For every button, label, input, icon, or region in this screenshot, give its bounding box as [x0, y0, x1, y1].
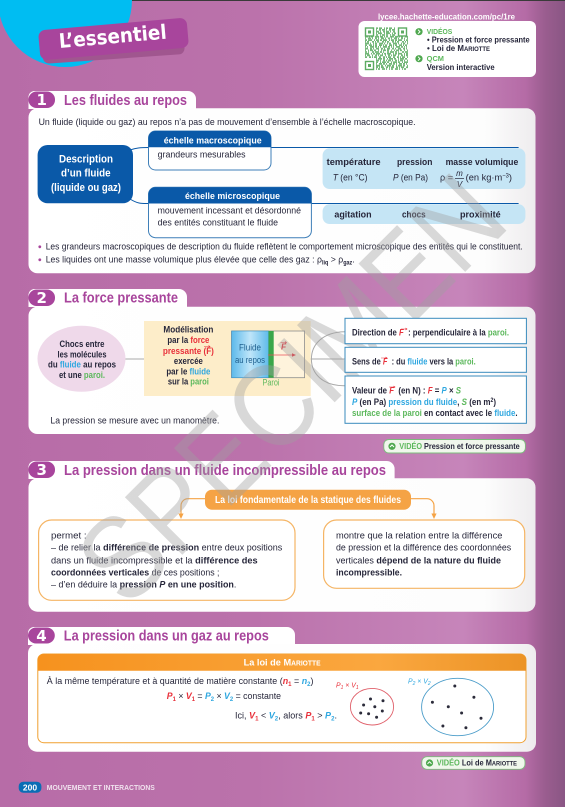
bullet list: gaz: [343, 261, 352, 267]
box: loi de Mariotte: P: [205, 691, 211, 702]
box: permet: coordonnées verticales de ces positions ;: [51, 568, 220, 579]
box: loi de Mariotte: 2: [331, 716, 335, 723]
box: permet: permet :: [51, 531, 87, 542]
schema: fluide au repos, paroi, force: au repos: [235, 355, 265, 366]
box: loi de Mariotte: 1: [192, 696, 195, 703]
diagram: gas at P2 V2: P: [408, 678, 413, 685]
ellipse: chocs entre les molécules: du fluide au repos: [48, 360, 116, 371]
panel 4: La pression dans un gaz au repos: [28, 627, 536, 752]
diagram: gas at P2 V2: 2: [427, 681, 431, 687]
heading tab 3: La pression dans un fluide incompressible au repos: [64, 462, 386, 479]
box: grandeurs mesurables: P (en Pa): [393, 173, 428, 184]
box: loi de Mariotte: 1: [173, 696, 176, 703]
box: modélisation: exercée: [174, 356, 203, 367]
box: comportement microscopique: chocs: [402, 210, 426, 221]
box: échelle microscopique: échelle microscopique: [185, 191, 280, 202]
box: loi de Mariotte: 1: [255, 716, 259, 723]
diagram: gas at P1 V1: ×: [343, 683, 351, 690]
box: loi de Mariotte: ): [311, 676, 313, 687]
ellipse: chocs entre les molécules: Chocs entre: [60, 339, 104, 350]
panel 3: La pression dans un fluide incompressible au repos: [28, 461, 536, 612]
box: comportement microscopique: [323, 204, 525, 224]
box: loi de Mariotte: 2: [307, 681, 311, 688]
box: valeur: Valeur de F (en N) : F = P × S: [352, 386, 461, 397]
heading tab 3: 3: [36, 461, 47, 479]
box: loi de Mariotte: 1: [288, 681, 292, 688]
video chip: pression et force pressante: VIDÉO Pression et force pressante: [399, 442, 520, 451]
box: sens: [345, 347, 526, 372]
QCM heading: QCM: [427, 56, 444, 63]
bullet list: Les liquides ont une masse volumique plus élevée que celle des gaz : ρ: [46, 255, 350, 266]
heading tab 2: 2: [36, 289, 47, 307]
bullet list: liq: [322, 261, 329, 267]
box: loi de Mariotte: <: [258, 711, 269, 722]
panel 2: La force pressante: [28, 289, 536, 434]
box: loi de Mariotte: .: [334, 711, 337, 722]
bullet list: [38, 242, 523, 267]
box: échelle microscopique: des entités constituant le fluide: [158, 218, 278, 229]
panel 1: Les fluides au repos: [28, 91, 536, 273]
box: loi de Mariotte: P: [305, 711, 312, 722]
box: grandeurs mesurables: −3: [502, 174, 510, 180]
box: modélisation: par la force: [167, 335, 209, 346]
heading tab 1: [28, 91, 196, 109]
box: modélisation: [144, 321, 311, 396]
diagram: gas at P1 V1: [336, 683, 394, 725]
video chip: pression et force pressante: [384, 440, 525, 453]
heading tab 1: Les fluides au repos: [64, 92, 187, 109]
video chip: loi de Mariotte: [422, 757, 525, 769]
box: loi de Mariotte: P: [325, 711, 332, 722]
box: description d'un fluide: Description: [59, 154, 113, 166]
box: loi de Mariotte: La loi de MARIOTTE: [244, 658, 321, 669]
box: loi de Mariotte: ×: [214, 691, 224, 702]
box: grandeurs mesurables: m: [456, 169, 463, 178]
bullet list: > ρ: [328, 255, 344, 266]
heading tab 2: [28, 289, 187, 307]
box: montre: incompressible.: [336, 568, 402, 579]
box: permet: dans un fluide incompressible et la différence des: [51, 555, 258, 566]
box: grandeurs mesurables: masse volumique: [446, 157, 518, 168]
box: loi de Mariotte: 2: [230, 696, 234, 703]
diagram: gas at P2 V2: ×: [415, 678, 423, 685]
box: modélisation: Modélisation: [163, 325, 214, 336]
schema: fluide au repos, paroi, force: F: [281, 341, 287, 351]
box: échelle microscopique: mouvement incessant et désordonné: [158, 206, 301, 217]
box: loi de Mariotte: = constante: [233, 691, 281, 702]
connector: schema to details: [311, 332, 345, 386]
box: sens: Sens de F : du fluide vers la paroi.: [352, 357, 476, 368]
box: loi de Mariotte: V: [224, 691, 231, 702]
box: grandeurs mesurables: ρ =: [440, 173, 453, 184]
diagram: gas at P2 V2: V: [423, 678, 428, 685]
box: valeur: P (en Pa) pression du fluide, S (en m: [352, 397, 495, 408]
box: loi de Mariotte: À la même température et à quantité de matière constante (n: [47, 676, 301, 687]
title: L'essentiel: [38, 18, 189, 64]
heading tab 4: La pression dans un gaz au repos: [64, 628, 269, 645]
diagram: gas at P1 V1: 1: [341, 685, 344, 691]
box: valeur: [345, 376, 526, 423]
box: loi de Mariotte: Ici, V: [235, 711, 255, 722]
box: grandeurs mesurables: [323, 148, 525, 189]
box: grandeurs mesurables: température: [327, 157, 381, 168]
bullet list: .: [352, 255, 355, 266]
box: valeur: 2: [491, 398, 494, 404]
box: valeur: surface de la paroi en contact avec le fluide.: [352, 408, 518, 419]
box: loi de Mariotte: V: [186, 691, 193, 702]
icon: QR code: [365, 28, 408, 70]
icon: QCM bullet: [415, 55, 423, 62]
box: grandeurs mesurables: pression: [397, 157, 433, 168]
diagram: gas at P2 V2: [408, 678, 494, 736]
schema: fluide au repos, paroi, force: Paroi: [262, 377, 280, 388]
video links: [427, 34, 530, 53]
box: loi de Mariotte: =: [292, 676, 302, 687]
intro text: Un fluide (liquide ou gaz) au repos n’a pas de mouvement d’ensemble à l’échelle macroscopique.: [39, 117, 416, 128]
box: description d'un fluide: d’un fluide: [61, 168, 111, 180]
ellipse: chocs entre les molécules: [38, 326, 126, 392]
box: loi de Mariotte: >: [315, 711, 325, 722]
icon: videos bullet: [415, 28, 423, 35]
box: grandeurs mesurables: T (en °C): [333, 173, 368, 184]
connector: chocs to modélisation: [125, 358, 144, 360]
videos heading: VIDÉOS: [427, 27, 453, 36]
box: direction: [345, 318, 526, 344]
box: modélisation: par le fluide: [166, 366, 210, 377]
box: échelle macroscopique: grandeurs mesurables: [158, 150, 246, 161]
box: loi de Mariotte: ×: [176, 691, 186, 702]
box: loi de Mariotte: n: [302, 676, 307, 687]
pill: loi fondamentale: [205, 490, 411, 510]
box: loi de Mariotte: P: [167, 691, 173, 702]
heading tab 4: 4: [36, 627, 47, 645]
video links: • Pression et force pressante: [427, 34, 530, 44]
box: montre: montre que la relation entre la différence: [336, 531, 502, 542]
box: valeur: ): [493, 397, 496, 408]
box: loi de Mariotte: 2: [275, 716, 279, 723]
ellipse: chocs entre les molécules: et une paroi.: [59, 370, 105, 381]
box: montre: verticales dépend de la nature du fluide: [336, 555, 501, 566]
box: direction: Direction de F : perpendiculaire à la paroi.: [352, 328, 509, 339]
diagram: gas at P1 V1: P: [336, 683, 341, 690]
box: comportement microscopique: proximité: [460, 210, 501, 221]
heading tab 1: 1: [36, 91, 47, 109]
QCM link: Version interactive: [427, 62, 495, 72]
schema: fluide au repos, paroi, force: [232, 331, 305, 388]
box: grandeurs mesurables: V: [457, 180, 463, 189]
footer: page number: [19, 782, 41, 793]
video chip: loi de Mariotte: VIDÉO Loi de MARIOTTE: [437, 759, 517, 768]
heading tab 2: La force pressante: [64, 290, 178, 307]
box: montre: de pression et la différence des coordonnées: [336, 543, 511, 554]
box: grandeurs mesurables: ): [509, 173, 512, 184]
box: échelle macroscopique: échelle macroscopique: [164, 135, 262, 146]
box: permet: – d’en déduire la pression P en une position.: [51, 580, 236, 591]
box: loi de Mariotte: [38, 654, 526, 743]
title: L'essentiel: L’essentiel: [58, 20, 168, 53]
box: loi de Mariotte: V: [269, 711, 276, 722]
diagram: gas at P2 V2: 2: [412, 681, 416, 687]
ellipse: chocs entre les molécules: les molécules: [58, 349, 106, 360]
box: comportement microscopique: agitation: [334, 210, 372, 221]
pill: loi fondamentale: La loi fondamentale de la statique des fluides: [215, 495, 401, 506]
box: loi de Mariotte: =: [195, 691, 205, 702]
text: manomètre: La pression se mesure avec un manomètre.: [50, 416, 219, 427]
box: modélisation: pressante (F): [163, 346, 214, 357]
arrows from law to boxes: [178, 499, 437, 519]
box: modélisation: sur la paroi: [168, 377, 209, 388]
video links: • Loi de MARIOTTE: [427, 43, 491, 53]
blue corner circle: [0, 0, 132, 67]
diagram: gas at P1 V1: V: [351, 683, 356, 690]
box: échelle macroscopique: [148, 131, 271, 170]
footer: page number: 200: [23, 782, 37, 792]
box: description d'un fluide: [38, 145, 133, 203]
box: permet: [39, 520, 295, 600]
schema: fluide au repos, paroi, force: Fluide: [239, 343, 261, 354]
footer: chapter title: MOUVEMENT ET INTERACTIONS: [47, 785, 155, 792]
box: loi de Mariotte: 2: [211, 696, 214, 703]
box: description d'un fluide: (liquide ou gaz): [51, 182, 121, 194]
box: montre: [324, 520, 525, 588]
box: grandeurs mesurables: (en kg·m: [466, 173, 503, 184]
box: permet: – de relier la différence de pression entre deux positions: [51, 543, 282, 554]
diagram: gas at P1 V1: 1: [356, 685, 359, 691]
box: loi de Mariotte: 1: [311, 716, 315, 723]
box: échelle microscopique: [148, 187, 311, 238]
panel: QR code and resources: [358, 21, 536, 77]
connector lines: [130, 148, 519, 204]
box: loi de Mariotte: , alors: [278, 711, 305, 722]
website url: lycee.hachette-education.com/pc/1re: [378, 12, 515, 22]
